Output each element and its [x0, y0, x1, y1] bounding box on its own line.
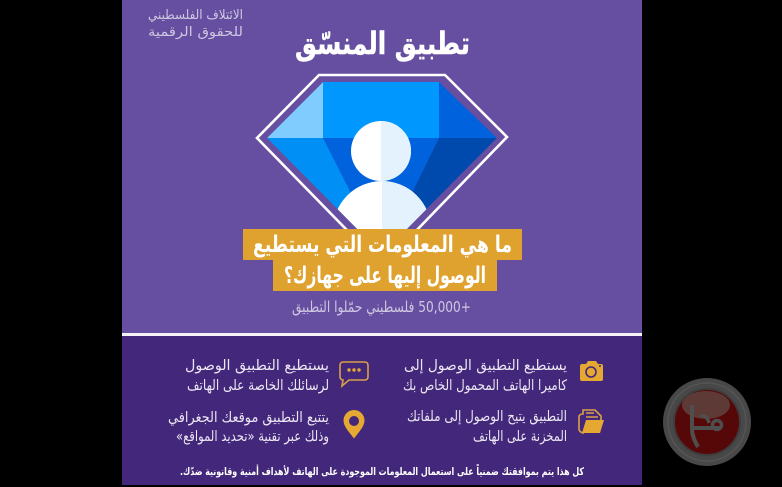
icon: diamond with user	[255, 74, 509, 229]
user body	[338, 181, 426, 229]
panel: lower dark purple	[122, 336, 642, 485]
icon: folder	[579, 410, 604, 433]
headline banner: الوصول إليها على جهازك؟	[284, 263, 486, 289]
camera text	[403, 358, 567, 394]
files text	[407, 409, 567, 445]
files text: المخزنة على الهاتف	[473, 429, 567, 445]
messages text	[185, 358, 329, 394]
download count: ‏+50,000 فلسطيني حمّلوا التطبيق	[292, 298, 471, 317]
headline banner	[243, 229, 522, 291]
panel: upper purple	[122, 0, 642, 334]
messages text: لرسائلك الخاصة على الهاتف	[187, 378, 329, 394]
footer note: كل هذا يتم بموافقتك ضمنياً على استعمال المعلومات الموجودة على الهاتف لأهداف أمنية وقانونية ضدّك.	[180, 464, 585, 478]
files text: التطبيق يتيح الوصول إلى ملفاتك	[407, 409, 567, 425]
icon: location pin	[344, 410, 364, 438]
diamond outline	[257, 75, 507, 266]
location text	[168, 410, 329, 445]
camera text: كاميرا الهاتف المحمول الخاص بك	[403, 378, 567, 394]
organisation name: الائتلاف الفلسطيني	[148, 8, 243, 23]
messages text: يستطيع التطبيق الوصول	[185, 358, 329, 374]
diamond facets	[267, 82, 497, 229]
user head	[351, 121, 411, 181]
location text: وذلك عبر تقنية «تحديد المواقع»	[176, 429, 329, 445]
camera text: يستطيع التطبيق الوصول إلى	[404, 358, 567, 374]
title: تطبيق المنسّق	[295, 26, 470, 62]
location text: يتتبع التطبيق موقعك الجغرافي	[168, 410, 329, 426]
icon: camera	[580, 361, 603, 381]
divider line	[122, 333, 642, 336]
logo watermark	[663, 378, 751, 466]
organisation name	[148, 8, 243, 40]
icon: chat bubble	[340, 362, 368, 386]
organisation name: للحقوق الرقمية	[148, 25, 243, 40]
headline banner: ما هي المعلومات التي يستطيع	[253, 232, 512, 258]
